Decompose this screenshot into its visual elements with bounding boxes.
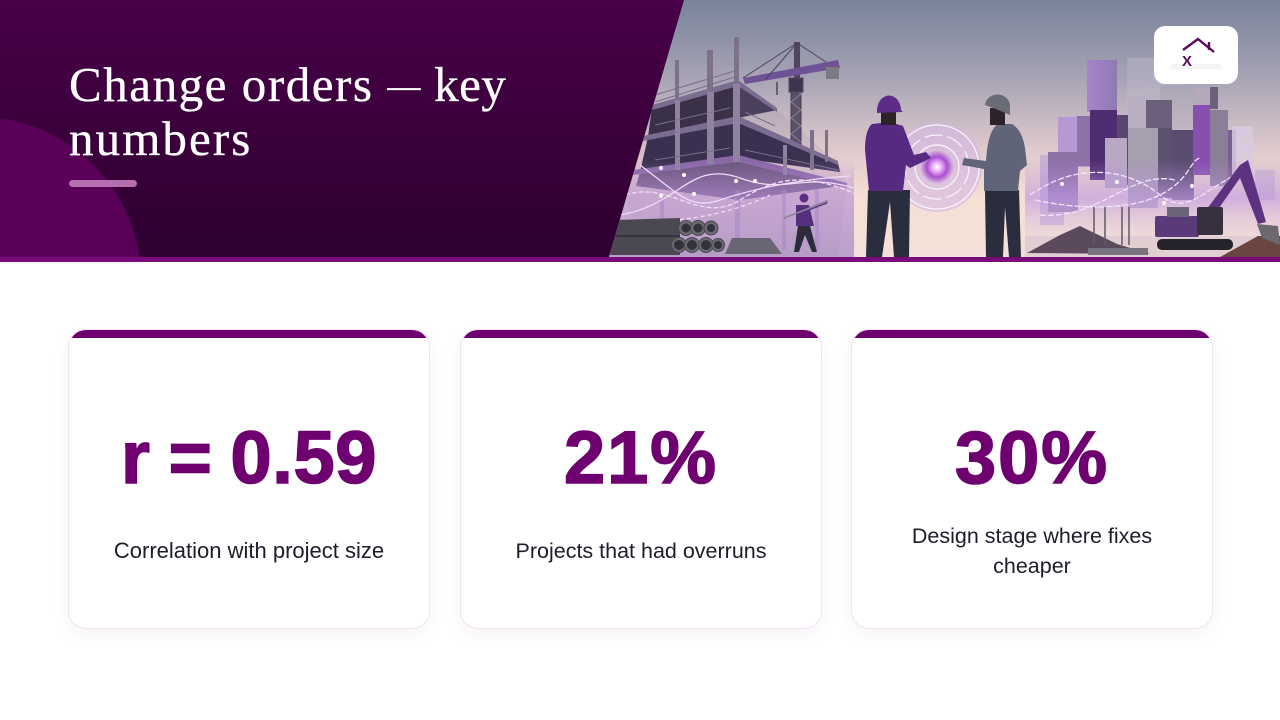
stat value: r = 0.59: [121, 416, 377, 499]
illustration: construction scene: [609, 37, 1280, 257]
stat value: 30%: [955, 416, 1109, 499]
logo badge: [1154, 26, 1238, 84]
pipes and concrete slabs: [610, 218, 782, 255]
title accent bar: [69, 180, 137, 187]
distant buildings: [1040, 58, 1275, 225]
title: Change orders — key numbers: [69, 57, 506, 166]
stat label: Correlation with project size: [114, 538, 384, 563]
stat card 2: [460, 329, 822, 629]
small worker: [784, 194, 828, 252]
excavator: [1155, 160, 1280, 250]
building frame: [625, 37, 847, 257]
header banner background: [0, 0, 1280, 262]
crane: [743, 42, 840, 146]
logo badge: X: [1182, 53, 1192, 70]
engineer left: [865, 95, 931, 257]
engineers with hologram: [865, 95, 1027, 257]
purple data haze and waves, right: [1025, 158, 1280, 234]
purple data haze and waves, left: [609, 160, 880, 257]
stat label: Projects that had overruns: [516, 539, 766, 563]
ground and dirt piles: [1025, 207, 1280, 257]
engineer right: [962, 95, 1027, 257]
stat card 3: [851, 329, 1213, 629]
stat card 1: [68, 329, 430, 629]
stat value: 21%: [564, 416, 718, 499]
stat label: Design stage where fixes cheaper: [912, 524, 1152, 578]
